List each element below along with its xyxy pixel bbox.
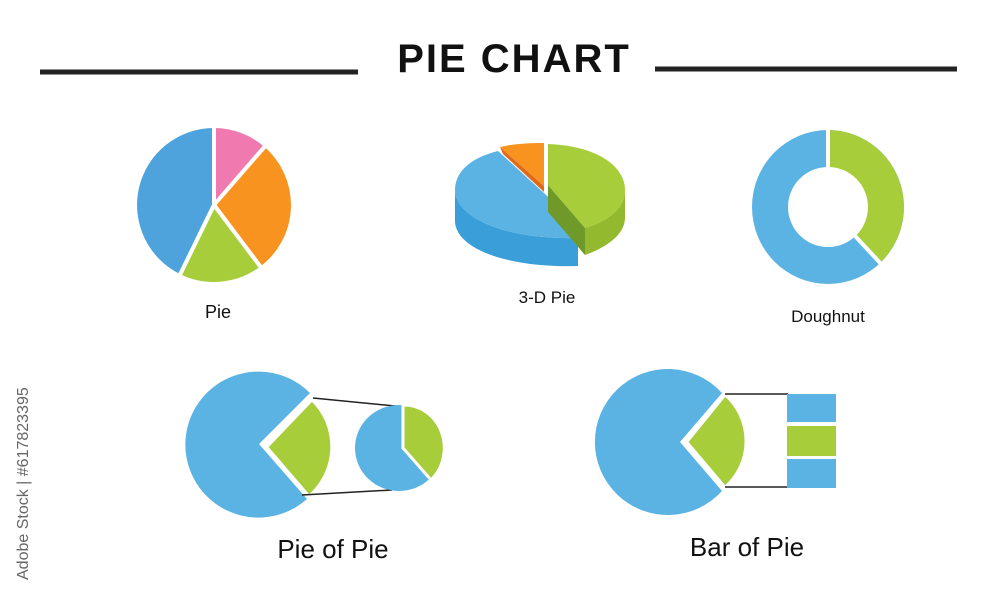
label: doughnut: Doughnut xyxy=(791,307,865,326)
title: PIE CHART xyxy=(397,37,631,81)
chart: doughnut xyxy=(752,126,904,284)
watermark text: Adobe Stock | #617823395 xyxy=(15,387,32,580)
label: pie: Pie xyxy=(205,302,231,322)
label: pie of pie: Pie of Pie xyxy=(277,534,389,564)
chart: 3-D pie xyxy=(455,143,625,266)
chart: bar of pie xyxy=(595,369,836,515)
label: bar of pie: Bar of Pie xyxy=(690,532,804,562)
chart: pie of pie xyxy=(185,372,444,518)
chart: pie xyxy=(135,126,293,284)
label: 3-D pie: 3-D Pie xyxy=(519,288,575,307)
